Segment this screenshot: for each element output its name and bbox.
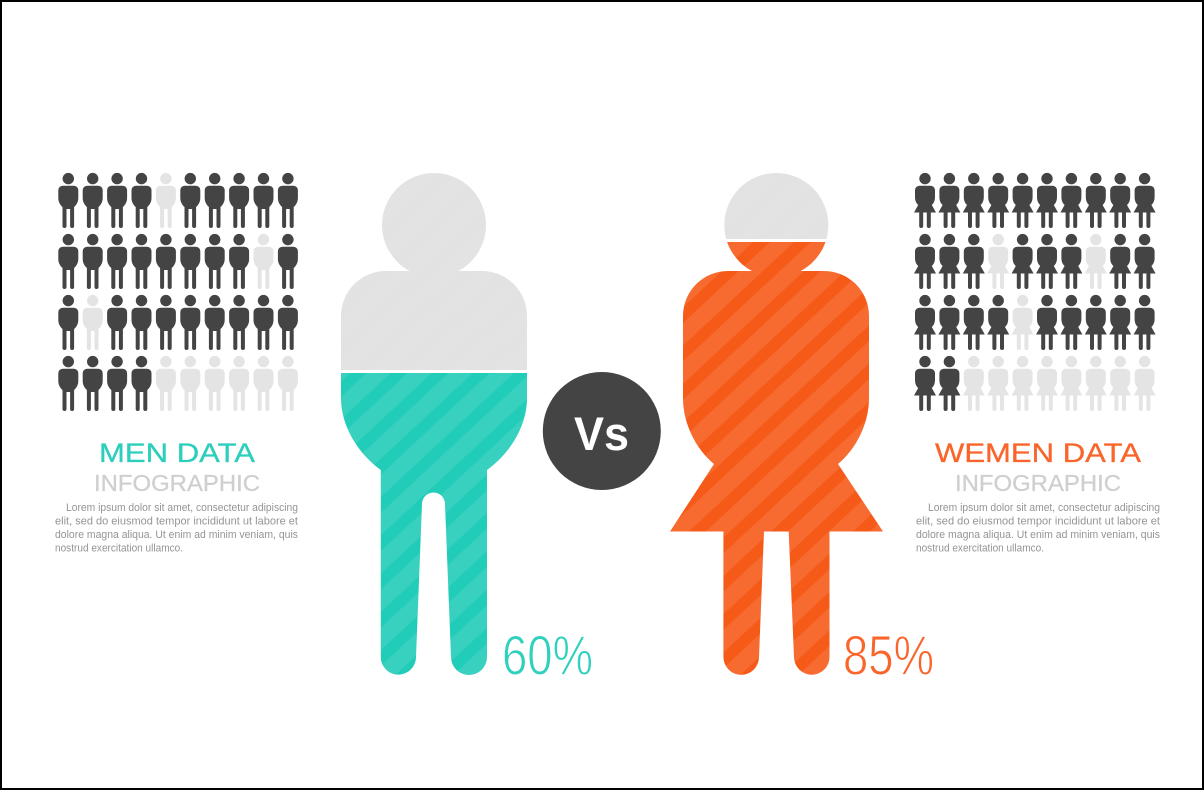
versus badge: Vs: [574, 407, 629, 460]
large man figure, filled to 60 percent: [341, 173, 527, 675]
men description: elit, sed do eiusmod tempor incididunt ut labore et: [55, 516, 299, 528]
versus badge: [543, 372, 661, 490]
large woman figure, filled to 85 percent: [670, 173, 883, 675]
women heading: WEMEN DATA: [935, 438, 1141, 468]
men percentage: 60%: [502, 624, 593, 686]
women percentage: 85%: [843, 624, 934, 686]
men description: dolore magna aliqua. Ut enim ad minim veniam, quis: [55, 529, 298, 541]
women description: [916, 502, 1161, 554]
icon grid: women data, 100 percent of people icons: [914, 173, 1156, 411]
men heading: MEN DATA: [99, 438, 255, 468]
women description: dolore magna aliqua. Ut enim ad minim veniam, quis: [916, 529, 1160, 541]
women description: Lorem ipsum dolor sit amet, consectetur adipiscing: [928, 502, 1160, 514]
men subheading: INFOGRAPHIC: [94, 470, 260, 496]
men description: nostrud exercitation ullamco.: [55, 542, 183, 554]
men description: [55, 502, 299, 554]
men description: Lorem ipsum dolor sit amet, consectetur adipiscing: [66, 502, 298, 514]
women description: elit, sed do eiusmod tempor incididunt ut labore et: [916, 516, 1161, 528]
women description: nostrud exercitation ullamco.: [916, 542, 1044, 554]
icon grid: men data, 100 percent of people icons: [58, 173, 298, 411]
women subheading: INFOGRAPHIC: [955, 470, 1121, 496]
